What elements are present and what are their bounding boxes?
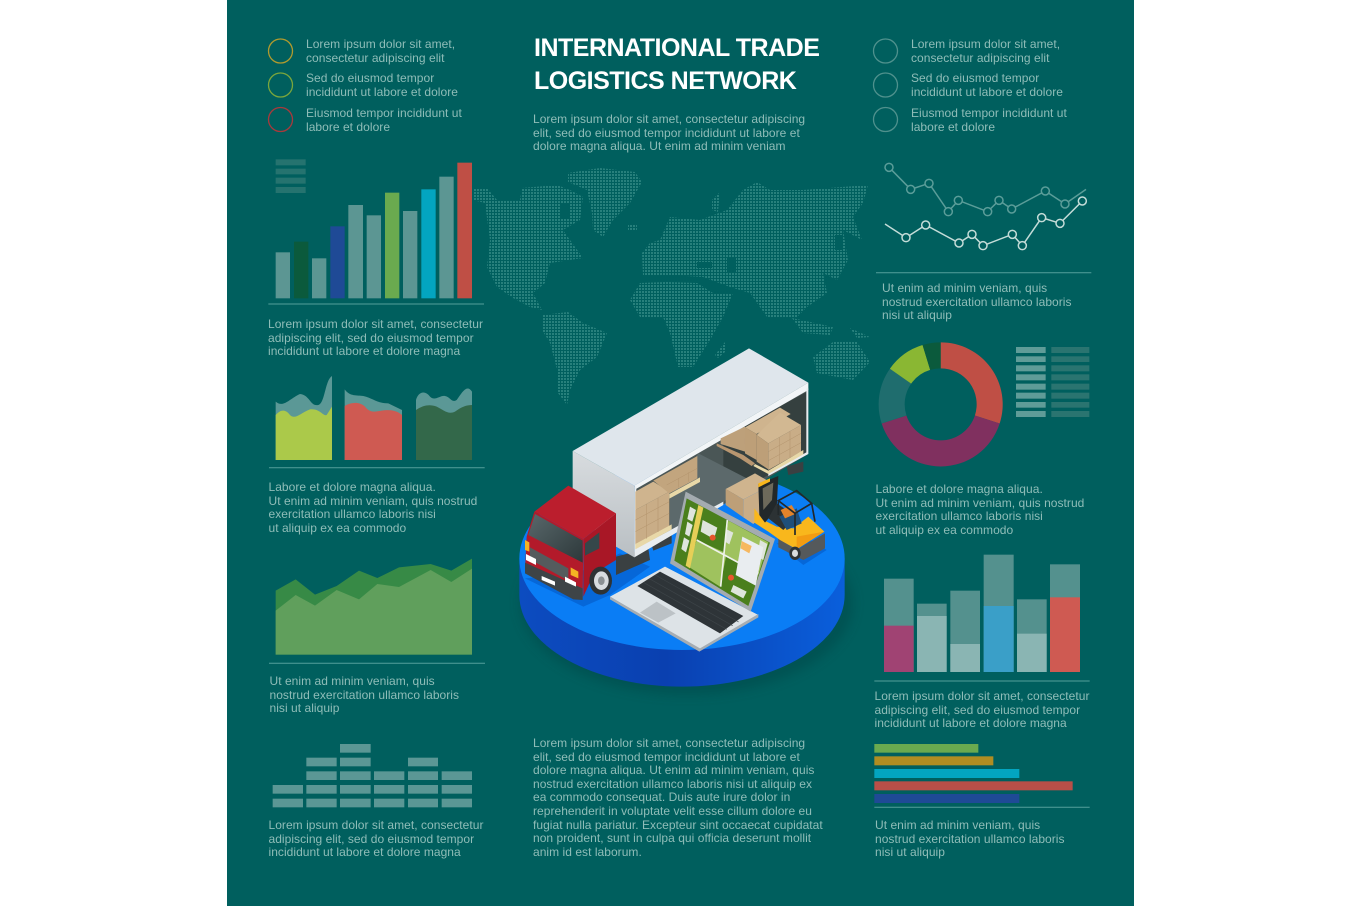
legend text right 3 [911,106,1067,134]
legend text right 1: Lorem ipsum dolor sit amet, [911,37,1060,51]
body text block center [533,736,823,859]
legend text left 1: Lorem ipsum dolor sit amet, [306,37,455,51]
title [534,34,819,95]
legend text left 1: consectetur adipiscing elit [306,51,444,65]
intro text: dolore magna aliqua. Ut enim ad minim veniam [533,139,786,153]
caption: bar chart: adipiscing elit, sed do eiusmod tempor [268,331,474,345]
stacked bar chart [874,555,1090,682]
donut legend bars [1016,347,1089,417]
caption: area charts: ut aliquip ex ea commodo [268,521,406,535]
caption: donut chart [876,482,1084,537]
legend text right 3: labore et dolore [911,120,995,134]
legend text left 3: Eiusmod tempor incididunt ut [306,106,462,120]
legend text right 1: consectetur adipiscing elit [911,51,1050,65]
line chart with two series [876,163,1091,273]
blue platform [519,467,853,695]
caption: bar chart: incididunt ut labore et dolore magna [268,344,460,358]
forklift [754,476,825,560]
delivery truck [525,348,808,600]
intro text: Lorem ipsum dolor sit amet, consectetur adipiscing [533,112,805,126]
body text block center: fugiat nulla pariatur. Excepteur sint occaecat cupidatat [533,818,823,832]
legend text left 3 [306,106,462,134]
caption: bar chart: Lorem ipsum dolor sit amet, consectetur [268,317,483,331]
legend text left 3: labore et dolore [306,120,390,134]
caption: block chart: adipiscing elit, sed do eiusmod tempor [268,832,474,846]
intro text [533,112,805,153]
caption: green area chart: nisi ut aliquip [270,701,339,715]
title: INTERNATIONAL TRADE [534,34,819,62]
body text block center: ea commodo consequat. Duis aute irure dolor in [533,790,790,804]
caption: stacked bars: Lorem ipsum dolor sit amet, consectetur [874,689,1089,703]
legend text left 2 [306,71,458,99]
body text block center: anim id est laborum. [533,845,642,859]
caption: line chart [882,281,1072,322]
legend text right 2: Sed do eiusmod tempor [911,71,1039,85]
body text block center: reprehenderit in voluptate velit esse cillum dolore eu [533,804,812,818]
legend text right 2: incididunt ut labore et dolore [911,85,1063,99]
green area chart [269,559,485,664]
block equalizer chart [273,744,472,807]
legend text right 1 [911,37,1060,65]
title: LOGISTICS NETWORK [534,67,796,95]
legend text left 2: Sed do eiusmod tempor [306,71,434,85]
isometric logistics illustration [519,348,853,695]
area charts: three small panels [269,376,485,468]
caption: line chart: nostrud exercitation ullamco laboris [882,295,1072,309]
legend circles left [268,39,292,132]
caption: horizontal bars [875,818,1065,859]
laptop [610,492,775,652]
caption: area charts: Ut enim ad minim veniam, quis nostrud [268,494,477,508]
caption: line chart: nisi ut aliquip [882,308,952,322]
caption: green area chart [270,674,459,715]
caption: green area chart: nostrud exercitation ullamco laboris [270,688,459,702]
caption: area charts [268,480,477,535]
caption: bar chart [268,317,483,358]
donut chart [879,342,1003,466]
caption: stacked bars: adipiscing elit, sed do eiusmod tempor [874,703,1080,717]
caption: donut chart: Labore et dolore magna aliqua. [876,482,1043,496]
caption: line chart: Ut enim ad minim veniam, quis [882,281,1047,295]
legend text left 2: incididunt ut labore et dolore [306,85,458,99]
world map [473,168,870,405]
caption: area charts: Labore et dolore magna aliqua. [268,480,436,494]
caption: horizontal bars: nisi ut aliquip [875,845,945,859]
caption: horizontal bars: nostrud exercitation ullamco laboris [875,832,1065,846]
caption: stacked bars [874,689,1090,730]
caption: stacked bars: incididunt ut labore et dolore magna [874,716,1067,730]
truck cab [583,513,616,597]
intro text: elit, sed do eiusmod tempor incididunt ut labore et [533,126,800,140]
horizontal bar chart [874,744,1090,808]
cargo pallets [635,408,803,549]
caption: donut chart: exercitation ullamco laboris nisi [876,509,1043,523]
legend circles right [874,39,898,132]
caption: horizontal bars: Ut enim ad minim veniam, quis [875,818,1040,832]
caption: area charts: exercitation ullamco laboris nisi [268,507,436,521]
caption: donut chart: ut aliquip ex ea commodo [876,523,1013,537]
caption: donut chart: Ut enim ad minim veniam, quis nostrud [876,496,1084,510]
bar chart: growth columns [268,159,484,305]
body text block center: dolore magna aliqua. Ut enim ad minim veniam, quis [533,763,814,777]
body text block center: elit, sed do eiusmod tempor incididunt ut labore et [533,750,800,764]
body text block center: nostrud exercitation ullamco laboris nisi ut aliquip ex [533,777,812,791]
body text block center: Lorem ipsum dolor sit amet, consectetur adipiscing [533,736,805,750]
caption: block chart: Lorem ipsum dolor sit amet, consectetur [268,818,483,832]
legend text left 1 [306,37,455,65]
caption: block chart: incididunt ut labore et dolore magna [268,845,461,859]
caption: green area chart: Ut enim ad minim veniam, quis [270,674,435,688]
caption: block chart [268,818,484,859]
body text block center: non proident, sunt in culpa qui officia deserunt mollit [533,831,811,845]
legend text right 3: Eiusmod tempor incididunt ut [911,106,1067,120]
legend text right 2 [911,71,1063,99]
